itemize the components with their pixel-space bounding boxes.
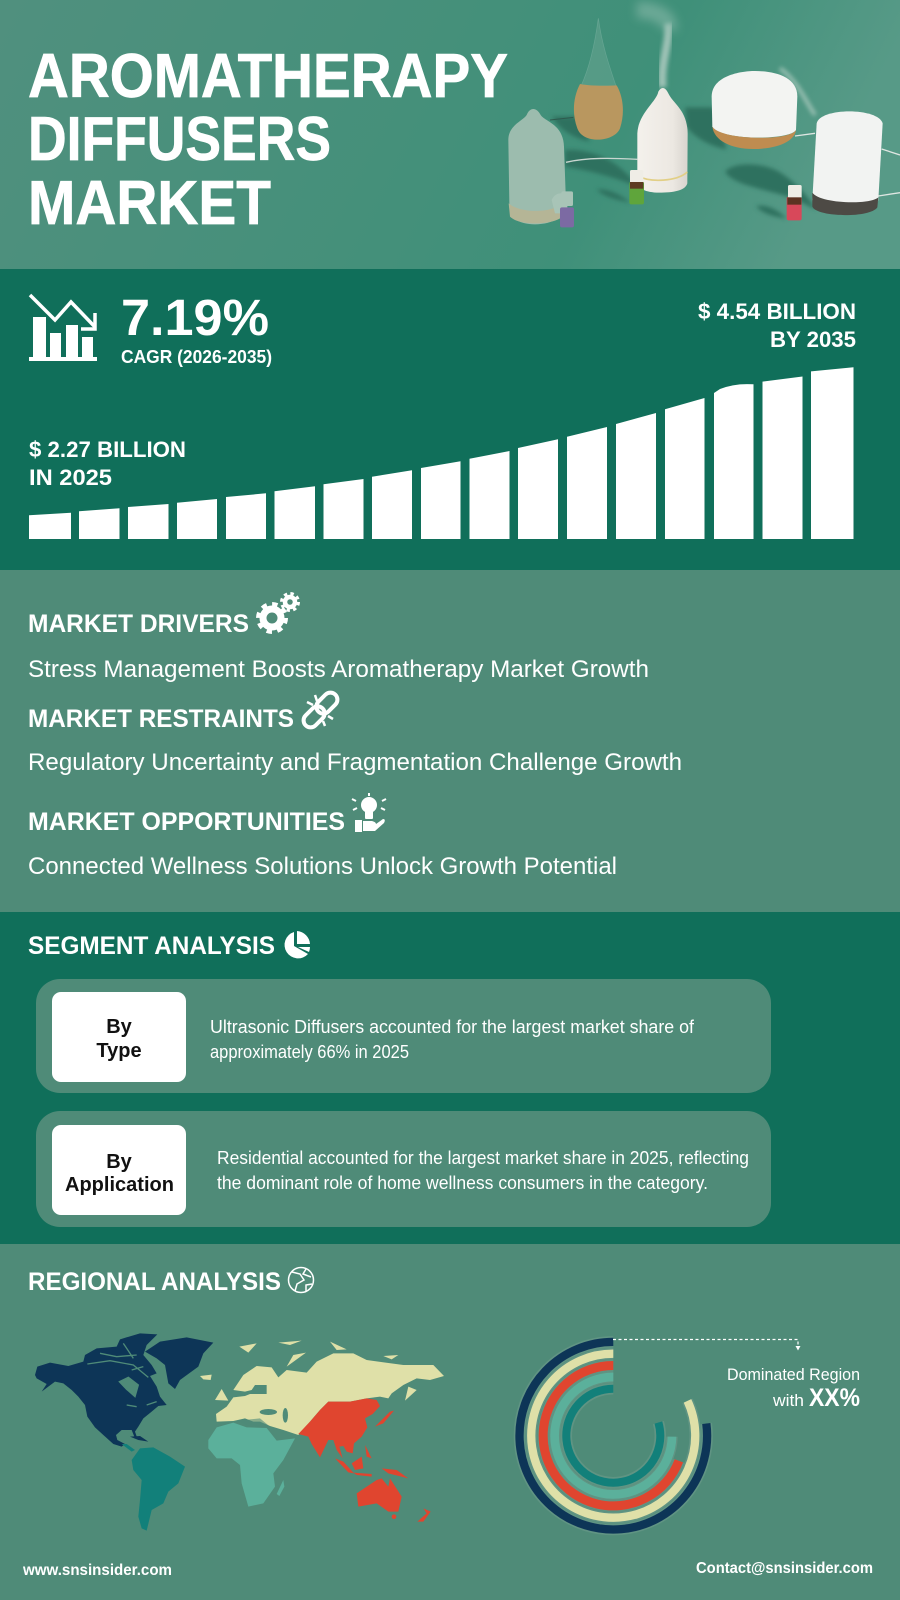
bar chart: growth 2025 to 2035 [29,367,854,539]
heading: market opportunities: MARKET OPPORTUNITIES [28,808,345,836]
callout: dominated region: Dominated Region [727,1366,860,1384]
big round diffuser [712,71,797,138]
text: opportunity: Connected Wellness Solutions Unlock Growth Potential [28,853,617,880]
card: by type: By [106,1016,133,1038]
callout: dominated region: XX% [809,1384,860,1412]
map: north america [35,1333,213,1447]
callout: dominated region: with [772,1392,804,1410]
2035 value [698,299,856,352]
white tall diffuser [637,88,688,193]
heading: market drivers: MARKET DRIVERS [28,610,249,638]
2025 value: $ 2.27 BILLION [29,437,186,462]
CAGR value: 7.19% [121,289,269,346]
map: europe and northern asia [200,1341,444,1435]
panel: market dynamics [0,570,900,912]
card: by type: Type [96,1040,142,1062]
card: by type: approximately 66% in 2025 [210,1042,409,1062]
icon: gears [258,594,298,632]
footer: contact: Contact@snsinsider.com [696,1560,873,1577]
title: AROMATHERAPY [28,42,508,111]
card: by application [36,1111,771,1227]
sage diffuser [508,109,566,224]
map: africa [208,1423,295,1507]
icon: hand holding light bulb [352,793,386,832]
2035 value: $ 4.54 BILLION [698,299,856,324]
panel: segment analysis [0,912,900,1244]
panel: regional analysis [0,1244,900,1600]
title: MARKET [28,169,271,238]
icon: chart with falling arrow [29,295,97,361]
radial chart: regional share [519,1342,707,1530]
card: by application: the dominant role of home wellness consumers in the category. [217,1173,708,1193]
2025 value [29,437,186,490]
footer: website: www.snsinsider.com [22,1562,172,1579]
heading: market restraints: MARKET RESTRAINTS [28,705,294,733]
panel: market size and CAGR [0,269,900,570]
card: by application: Application [65,1174,174,1196]
2035 value: BY 2035 [770,327,856,352]
icon: globe [288,1268,314,1292]
card: by type [36,979,771,1093]
heading: segment analysis: SEGMENT ANALYSIS [28,932,275,960]
card: by type: Ultrasonic Diffusers accounted for the largest market share of [210,1017,695,1037]
white cylinder diffuser [812,111,883,212]
glass flask [581,18,616,86]
steam [662,23,669,87]
icon: pie chart [285,931,310,958]
text: driver: Stress Management Boosts Aromatherapy Market Growth [28,656,649,683]
icon: broken link [301,690,340,730]
card: by application: By [106,1151,133,1173]
card: by application: Residential accounted for the largest market share in 2025, reflecting [217,1148,749,1168]
map: south america [122,1444,185,1531]
CAGR label: CAGR (2026-2035) [121,347,272,367]
map: hudson bay and arctic channels [87,1343,157,1407]
title [28,42,508,238]
title: DIFFUSERS [28,105,331,174]
text: restraint: Regulatory Uncertainty and Fragmentation Challenge Growth [28,749,682,776]
callout: dominated region [727,1366,860,1412]
heading: regional analysis: REGIONAL ANALYSIS [28,1268,281,1296]
map: south and east asia and oceania [298,1398,431,1522]
2025 value: IN 2025 [29,465,112,490]
map: inland seas [238,1408,288,1427]
panel: header [0,0,900,269]
photo: aromatherapy diffusers [508,10,900,227]
world map [35,1333,444,1531]
arrow: dashed callout line [613,1340,800,1350]
